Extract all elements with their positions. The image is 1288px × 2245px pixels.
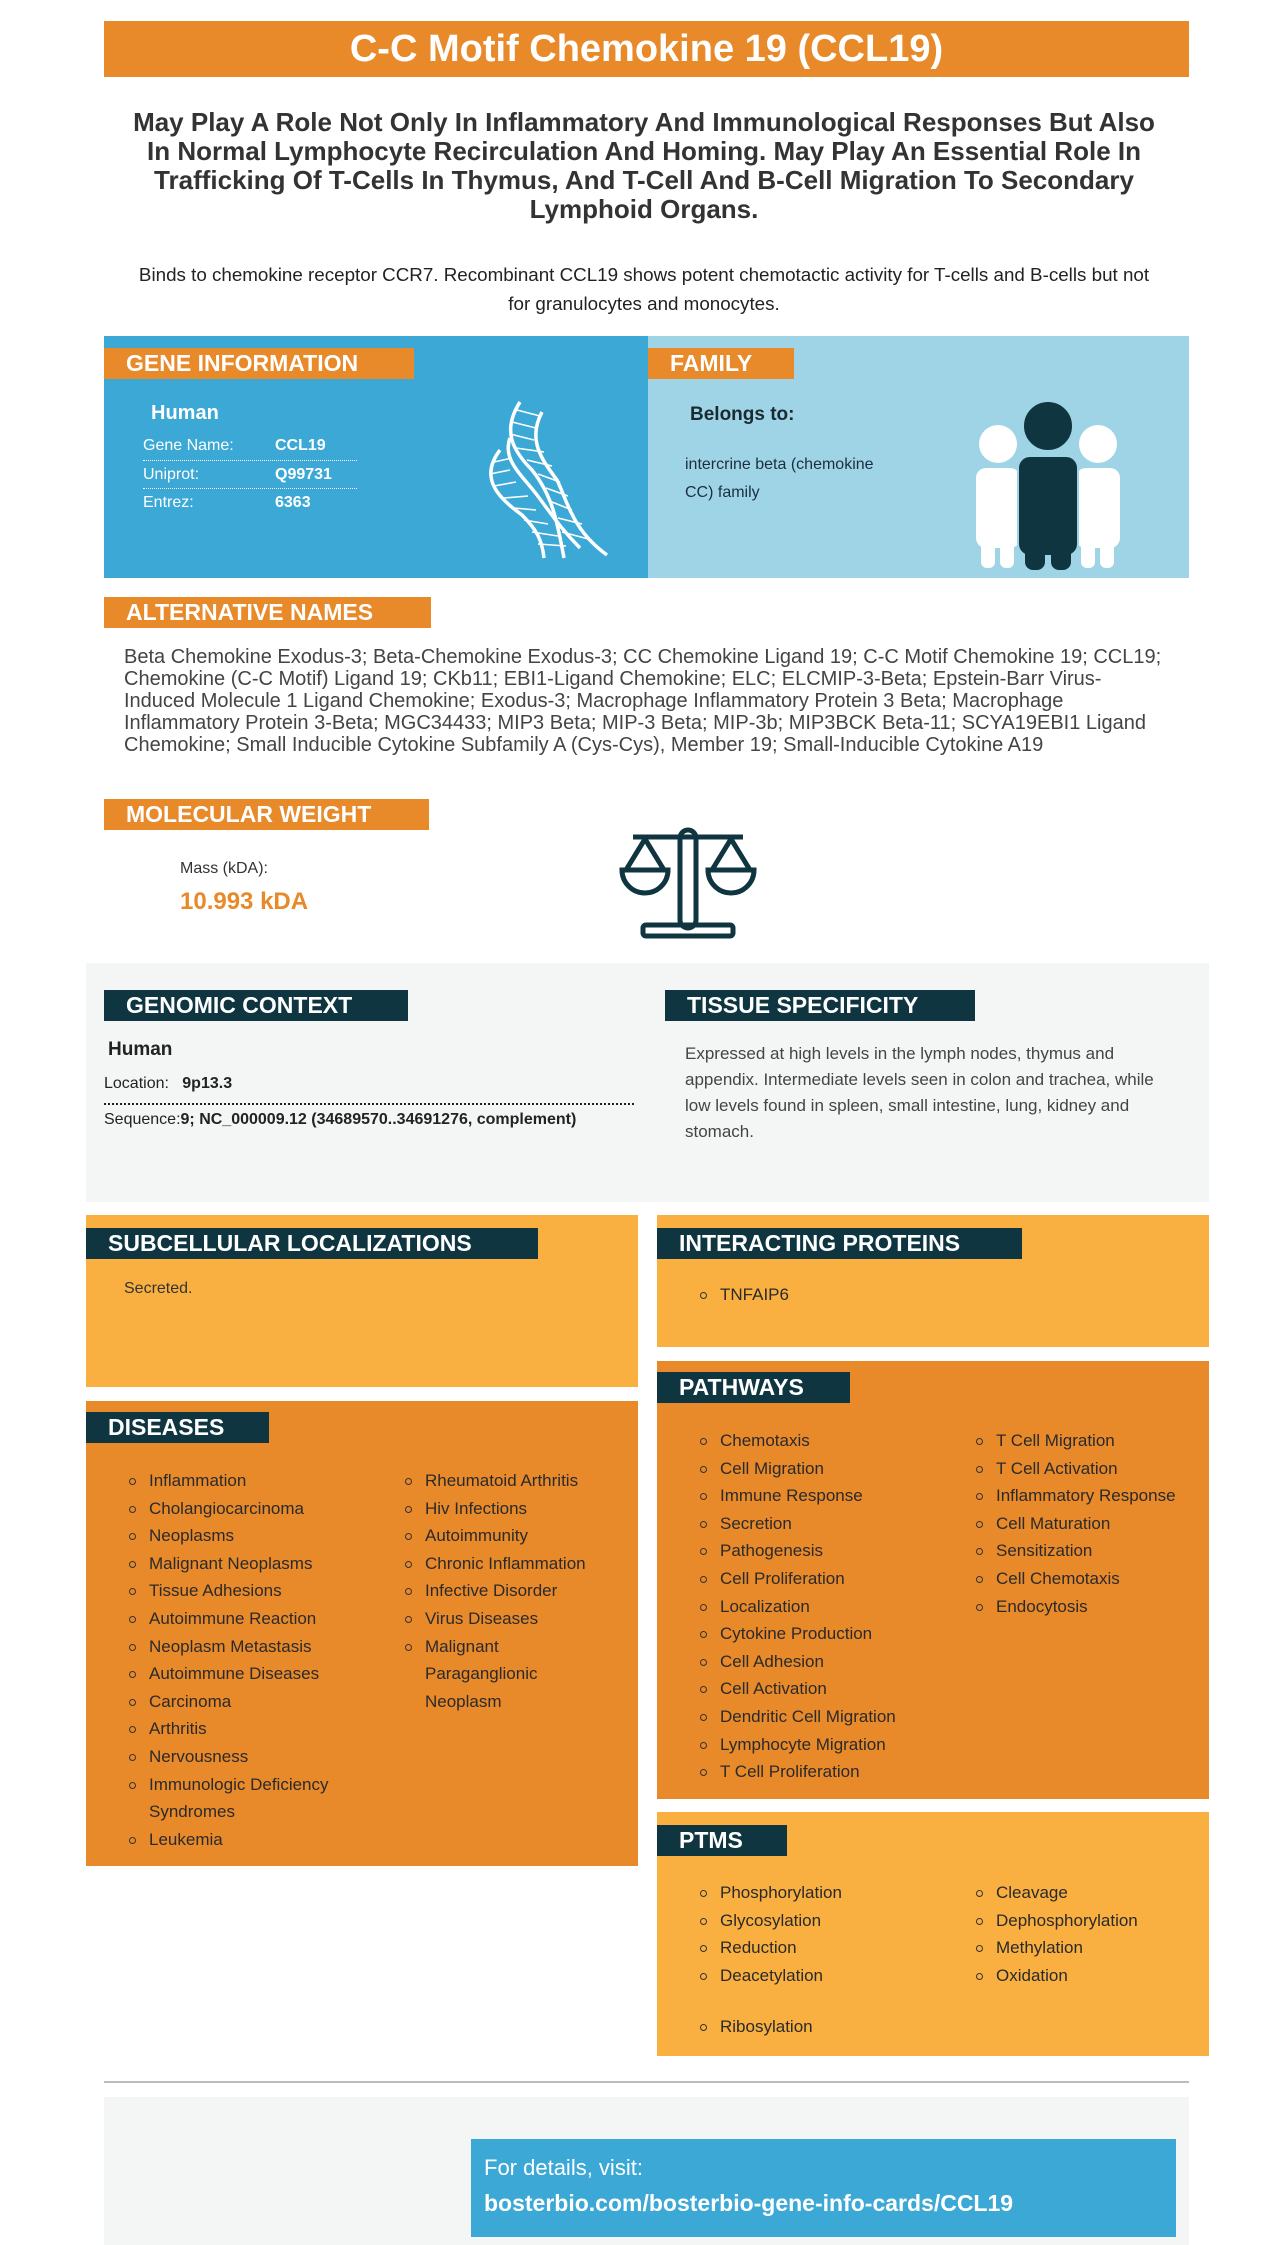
text: gene details: CCL19: [275, 437, 326, 454]
list: ptms col 2: Cleavage: [996, 1883, 1068, 1902]
callout: details link: [471, 2139, 1176, 2237]
list: diseases col 1: Arthritis: [149, 1719, 207, 1738]
text: gene details: Gene Name:: [143, 437, 234, 454]
text: gene details: Q99731: [275, 466, 332, 483]
panel: gene information: [104, 336, 648, 578]
list: diseases col 1: Autoimmune Reaction: [149, 1609, 316, 1628]
list: ptms col 1: Deacetylation: [720, 1966, 823, 1985]
list: diseases col 1: Neoplasm Metastasis: [149, 1637, 312, 1656]
list: diseases col 2: Virus Diseases: [425, 1609, 538, 1628]
list: ptms col 2: Methylation: [996, 1938, 1083, 1957]
subtitle: Lymphoid Organs.: [530, 194, 758, 224]
text: tissue specificity: Expressed at high levels in the lymph nodes, thymus and: [685, 1044, 1114, 1063]
heading: molecular weight: MOLECULAR WEIGHT: [126, 801, 371, 827]
subtitle: Trafficking Of T-Cells In Thymus, And T-Cell And B-Cell Migration To Secondary: [154, 165, 1134, 195]
title: [104, 21, 1189, 77]
list: diseases col 2: Autoimmunity: [425, 1526, 528, 1545]
list: pathways col 1: T Cell Proliferation: [720, 1762, 860, 1781]
panel: interacting proteins: [657, 1215, 1209, 1347]
callout: details link: bosterbio.com/bosterbio-gene-info-cards/CCL19: [484, 2190, 1013, 2216]
title: C-C Motif Chemokine 19 (CCL19): [350, 28, 943, 70]
list: pathways col 1: Cell Adhesion: [720, 1652, 824, 1671]
heading: ptms: [657, 1825, 787, 1856]
list: pathways col 2: T Cell Migration: [996, 1431, 1115, 1450]
heading: interacting proteins: [657, 1228, 1022, 1259]
icon: scale: [620, 828, 756, 938]
heading: subcellular: [86, 1228, 538, 1259]
panel: pathways: [657, 1361, 1209, 1799]
heading: tissue specificity: TISSUE SPECIFICITY: [687, 992, 918, 1018]
list: ptms col 2: [976, 1883, 1138, 1985]
text: genomic details: Human: [108, 1039, 172, 1060]
list: diseases col 1: Autoimmune Diseases: [149, 1664, 319, 1683]
text: alternative names: Inflammatory Protein 3-Beta; MGC34433; MIP3 Beta; MIP-3 Beta; MIP-3b; MIP3BCK Beta-11; SCYA19EBI1 Ligand: [124, 712, 1146, 734]
list: pathways col 1: Cell Migration: [720, 1459, 824, 1478]
text: tissue specificity: appendix. Intermediate levels seen in colon and trachea, while: [685, 1070, 1154, 1089]
heading: subcellular: SUBCELLULAR LOCALIZATIONS: [108, 1230, 472, 1256]
text: gene details: Human: [151, 402, 219, 424]
list: pathways col 1: Dendritic Cell Migration: [720, 1707, 896, 1726]
list: pathways col 2: Cell Maturation: [996, 1514, 1110, 1533]
list: ptms col 1: Phosphorylation: [720, 1883, 842, 1902]
text: gene details: Entrez:: [143, 494, 194, 511]
text: genomic details: Location: 9p13.3: [104, 1075, 232, 1092]
icon: DNA: [489, 401, 608, 558]
footer panel: [104, 2097, 1189, 2245]
list: pathways col 1: [700, 1431, 896, 1781]
heading: diseases: DISEASES: [108, 1414, 224, 1440]
list: pathways col 2: T Cell Activation: [996, 1459, 1118, 1478]
heading: alternative names: [104, 597, 431, 628]
text: mass value: 10.993 kDA: [180, 888, 308, 915]
heading: tissue specificity: [665, 990, 975, 1021]
heading: ptms: PTMS: [679, 1827, 743, 1853]
heading: diseases: [86, 1412, 269, 1443]
list: pathways col 1: Immune Response: [720, 1486, 863, 1505]
list: ptms col 1: Reduction: [720, 1938, 797, 1957]
text: tissue specificity: low levels found in spleen, small intestine, lung, kidney and: [685, 1096, 1129, 1115]
list: pathways col 1: Secretion: [720, 1514, 792, 1533]
description: for granulocytes and monocytes.: [508, 293, 780, 314]
list: diseases col 1: Cholangiocarcinoma: [149, 1499, 304, 1518]
text: alternative names: Beta Chemokine Exodus-3; Beta-Chemokine Exodus-3; CC Chemokine Ligand 19; C-C Motif Chemokine 19; CCL19;: [124, 646, 1161, 668]
list: ptms col 2: Oxidation: [996, 1966, 1068, 1985]
text: alternative names: Induced Molecule 1 Ligand Chemokine; Exodus-3; Macrophage Inflammatory Protein 3 Beta; Macrophage: [124, 690, 1063, 712]
list: ptms col 2: Dephosphorylation: [996, 1911, 1138, 1930]
list: diseases col 1: Immunologic Deficiency Syndromes: [149, 1775, 329, 1821]
list: diseases col 1: Leukemia: [149, 1830, 223, 1849]
list: pathways col 1: Cell Activation: [720, 1679, 827, 1698]
heading: family: FAMILY: [670, 350, 752, 376]
list: diseases col 1: Tissue Adhesions: [149, 1581, 282, 1600]
list: diseases col 2: Hiv Infections: [425, 1499, 527, 1518]
heading: interacting proteins: INTERACTING PROTEINS: [679, 1230, 960, 1256]
list: proteins: TNFAIP6: [720, 1285, 789, 1304]
text: gene details: Uniprot:: [143, 466, 199, 483]
list: ptms col 1: [700, 1883, 842, 2036]
list: diseases col 2: [405, 1471, 586, 1711]
text: alternative names: [124, 646, 1161, 756]
heading: molecular weight: [104, 799, 429, 830]
list: diseases col 2: Rheumatoid Arthritis: [425, 1471, 578, 1490]
list: pathways col 1: Lymphocyte Migration: [720, 1735, 886, 1754]
list: pathways col 1: Chemotaxis: [720, 1431, 810, 1450]
heading: family: [648, 348, 794, 379]
subtitle: May Play A Role Not Only In Inflammatory And Immunological Responses But Also: [133, 107, 1155, 137]
heading: genomic context: GENOMIC CONTEXT: [126, 992, 352, 1018]
list: pathways col 1: Cell Proliferation: [720, 1569, 845, 1588]
list: pathways col 2: Endocytosis: [996, 1597, 1088, 1616]
text: alternative names: Chemokine (C-C Motif) Ligand 19; CKb11; EBI1-Ligand Chemokine; ELC; ELCMIP-3-Beta; Epstein-Barr Virus-: [124, 668, 1101, 690]
list: diseases col 2: Malignant Paraganglionic Neoplasm: [425, 1637, 537, 1711]
list: pathways col 2: Cell Chemotaxis: [996, 1569, 1120, 1588]
panel: family: [648, 336, 1189, 578]
list: pathways col 2: Sensitization: [996, 1541, 1092, 1560]
heading: alternative names: ALTERNATIVE NAMES: [126, 599, 373, 625]
text: family name: intercrine beta (chemokine CC) family: [685, 456, 874, 501]
panel: genomic context and tissue specificity: [86, 963, 1209, 1202]
text: gene details: [143, 402, 357, 511]
panel: diseases: [86, 1401, 638, 1866]
text: belongs to: Belongs to:: [690, 404, 794, 425]
subtitle: [133, 107, 1155, 224]
list: ptms col 1: Ribosylation: [720, 2017, 813, 2036]
heading: genomic context: [104, 990, 408, 1021]
list: diseases col 1: [129, 1471, 329, 1849]
list: diseases col 1: Malignant Neoplasms: [149, 1554, 312, 1573]
text: genomic details: Sequence:9; NC_000009.12 (34689570..34691276, complement): [104, 1111, 576, 1128]
text: gene details: 6363: [275, 494, 311, 511]
list: pathways col 1: Pathogenesis: [720, 1541, 823, 1560]
text: alternative names: Chemokine; Small Inducible Cytokine Subfamily A (Cys-Cys), Member 19; Small-Inducible Cytokine A19: [124, 734, 1043, 756]
subtitle: In Normal Lymphocyte Recirculation And Homing. May Play An Essential Role In: [147, 136, 1141, 166]
list: pathways col 2: Inflammatory Response: [996, 1486, 1176, 1505]
icon: people: [976, 402, 1120, 570]
list: diseases col 2: Chronic Inflammation: [425, 1554, 586, 1573]
list: ptms col 1: Glycosylation: [720, 1911, 821, 1930]
list: diseases col 1: Nervousness: [149, 1747, 248, 1766]
heading: gene information: GENE INFORMATION: [126, 350, 358, 376]
list: pathways col 1: Cytokine Production: [720, 1624, 872, 1643]
heading: gene information: [104, 348, 414, 379]
text: secreted: Secreted.: [124, 1280, 192, 1297]
list: diseases col 1: Inflammation: [149, 1471, 246, 1490]
text: tissue specificity: stomach.: [685, 1122, 754, 1141]
description: [139, 264, 1149, 314]
text: mass label: Mass (kDA):: [180, 860, 268, 877]
heading: pathways: [657, 1372, 850, 1403]
text: tissue specificity: [685, 1044, 1154, 1141]
list: diseases col 2: Infective Disorder: [425, 1581, 557, 1600]
list: pathways col 1: Localization: [720, 1597, 810, 1616]
text: genomic details: [104, 1039, 634, 1128]
list: pathways col 2: [976, 1431, 1176, 1616]
panel: subcellular localizations: [86, 1215, 638, 1387]
list: diseases col 1: Neoplasms: [149, 1526, 234, 1545]
description: Binds to chemokine receptor CCR7. Recombinant CCL19 shows potent chemotactic activity for T-cells and B-cells but not: [139, 264, 1149, 285]
list: diseases col 1: Carcinoma: [149, 1692, 231, 1711]
callout: details link: For details, visit:: [484, 2155, 643, 2180]
heading: pathways: PATHWAYS: [679, 1374, 804, 1400]
panel: ptms: [657, 1812, 1209, 2056]
